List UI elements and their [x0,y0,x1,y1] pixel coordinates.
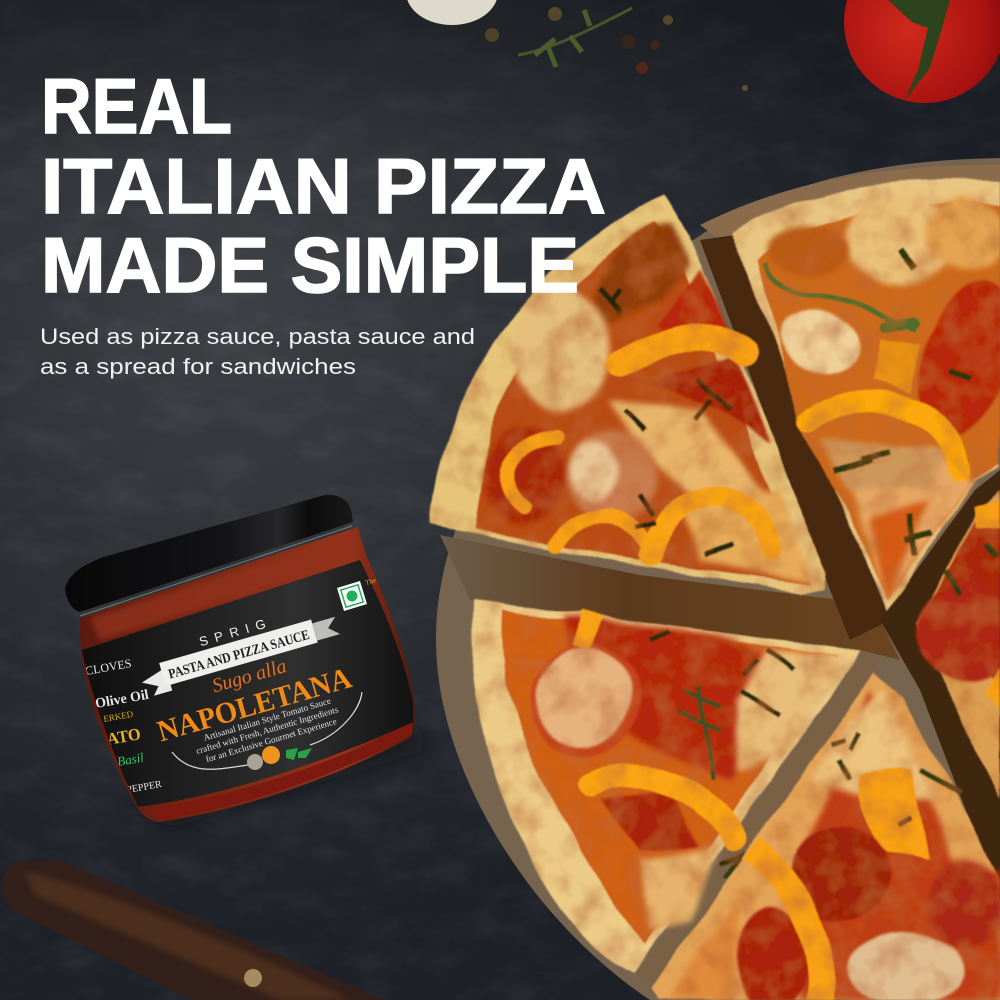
subtitle: Used as pizza sauce, pasta sauce and [40,324,475,349]
subtitle [40,324,475,379]
jar lid [65,495,353,612]
garlic at top edge [406,0,498,25]
wooden knife handle [2,860,385,1000]
side text: olive oil: Olive Oil [94,688,150,712]
illustration: tomato, garlic, basil [247,746,312,770]
description: Artisanal Italian Style Tomato Sauce [202,696,332,743]
label [82,560,413,807]
pizza slice: right edge [916,490,1000,800]
side panel text: The [364,576,377,587]
pizza slice: top left [430,193,828,592]
side text: basil: Basil [116,749,145,769]
banner [138,613,342,698]
side text: pepper: PEPPER [126,779,163,796]
veg mark [337,581,367,611]
pizza slice: top right [732,180,1000,612]
description: for an Exclusive Gourmet Experience [205,716,338,764]
jar glass with sauce [80,527,415,822]
sugo alla: Sugo alla [210,655,289,697]
title: REAL [41,62,232,150]
flourish [172,692,362,769]
product name: NAPOLETANA [154,661,355,748]
rim highlight [80,526,352,616]
pizza slice: bottom left [471,600,860,975]
title: MADE SIMPLE [41,221,579,309]
title: ITALIAN PIZZA [41,142,606,230]
clipped side text [84,656,163,796]
sauce jar product [65,495,425,828]
scattered herbs and peppercorns [485,7,748,91]
banner: PASTA AND PIZZA SAUCE [167,628,311,683]
side text: cloves: CLOVES [84,656,132,678]
tomato at top right [844,0,1000,103]
pizza slices [430,180,1000,1000]
subtitle: as a spread for sandwiches [40,354,356,379]
knife rivet [244,969,262,987]
pizza slice: bottom right [650,672,1000,1000]
brand: SPRIG [197,614,274,649]
side text: sun-dried: ERKED [103,709,134,724]
title [41,62,606,309]
wooden pizza board [436,158,1000,1000]
description: crafted with Fresh, Authentic Ingredients [195,704,340,756]
jar shadow [130,725,425,828]
side text: tomato: ATO [105,724,142,749]
